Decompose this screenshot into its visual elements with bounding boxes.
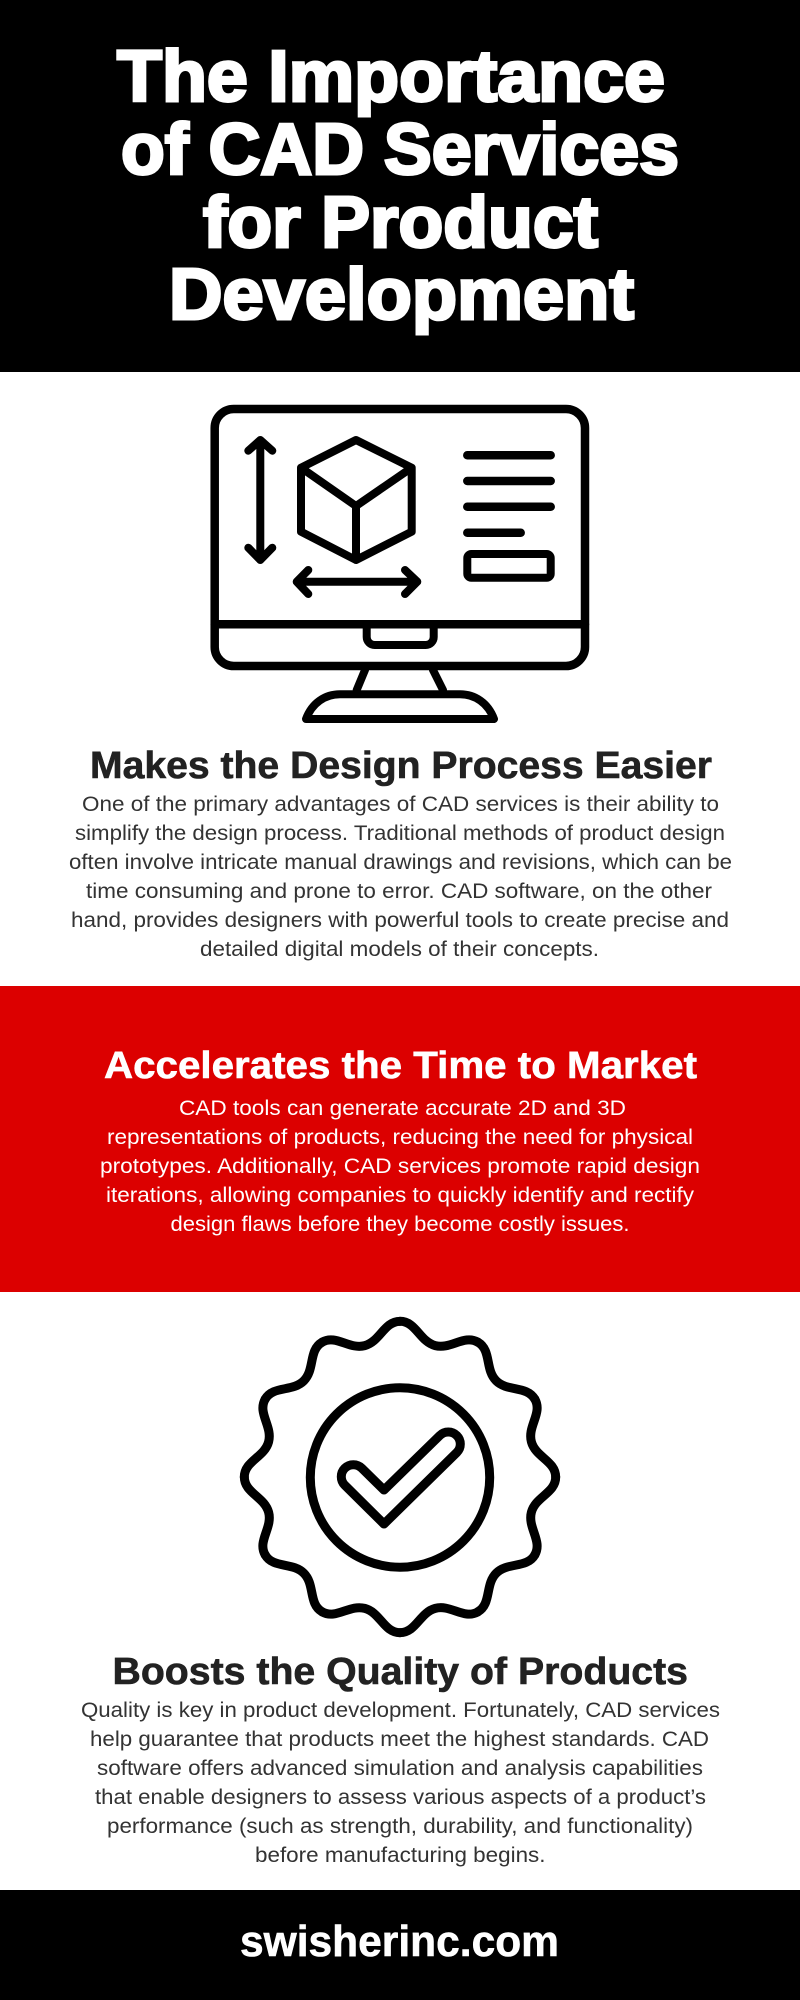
text block: software offers advanced simulation and analysis capabilities <box>97 1757 703 1780</box>
title: for Product <box>203 183 598 263</box>
icon: quality badge with check mark <box>226 1303 574 1651</box>
title <box>117 37 679 335</box>
text block: CAD tools can generate accurate 2D and 3D <box>179 1097 626 1120</box>
panel: footer <box>0 1890 800 2000</box>
text block: detailed digital models of their concepts. <box>200 938 599 961</box>
text block: time consuming and prone to error. CAD software, on the other <box>86 880 712 903</box>
text block: One of the primary advantages of CAD services is their ability to <box>82 793 719 816</box>
title: of CAD Services <box>121 110 679 190</box>
text block: representations of products, reducing the need for physical <box>107 1126 693 1149</box>
footer website: swisherinc.com <box>240 1917 559 1966</box>
panel: accelerates the time to market <box>0 986 800 1292</box>
text block: performance (such as strength, durability, and functionality) <box>107 1815 693 1838</box>
text block: iterations, allowing companies to quickly identify and rectify <box>106 1184 695 1207</box>
text block: help guarantee that products meet the highest standards. CAD <box>90 1728 709 1751</box>
text block: prototypes. Additionally, CAD services promote rapid design <box>100 1155 700 1178</box>
panel: boosts the quality of products <box>81 1303 720 1867</box>
heading: Accelerates the Time to Market <box>104 1045 697 1087</box>
heading: Boosts the Quality of Products <box>112 1651 688 1693</box>
panel: title header <box>0 0 800 372</box>
text block: that enable designers to assess various aspects of a product’s <box>95 1786 706 1809</box>
text block <box>81 1699 720 1867</box>
text block: design flaws before they become costly issues. <box>170 1213 630 1236</box>
text block: often involve intricate manual drawings and revisions, which can be <box>69 851 732 874</box>
text block <box>69 793 732 961</box>
text block: before manufacturing begins. <box>255 1844 546 1867</box>
text block: Quality is key in product development. Fortunately, CAD services <box>81 1699 720 1722</box>
icon: computer monitor with CAD cube <box>215 409 585 719</box>
title: Development <box>169 255 634 335</box>
heading: Makes the Design Process Easier <box>90 745 712 787</box>
text block: simplify the design process. Traditional methods of product design <box>75 822 725 845</box>
text block <box>100 1097 700 1236</box>
text block: hand, provides designers with powerful tools to create precise and <box>71 909 729 932</box>
panel: makes the design process easier <box>69 409 732 961</box>
title: The Importance <box>117 37 665 117</box>
